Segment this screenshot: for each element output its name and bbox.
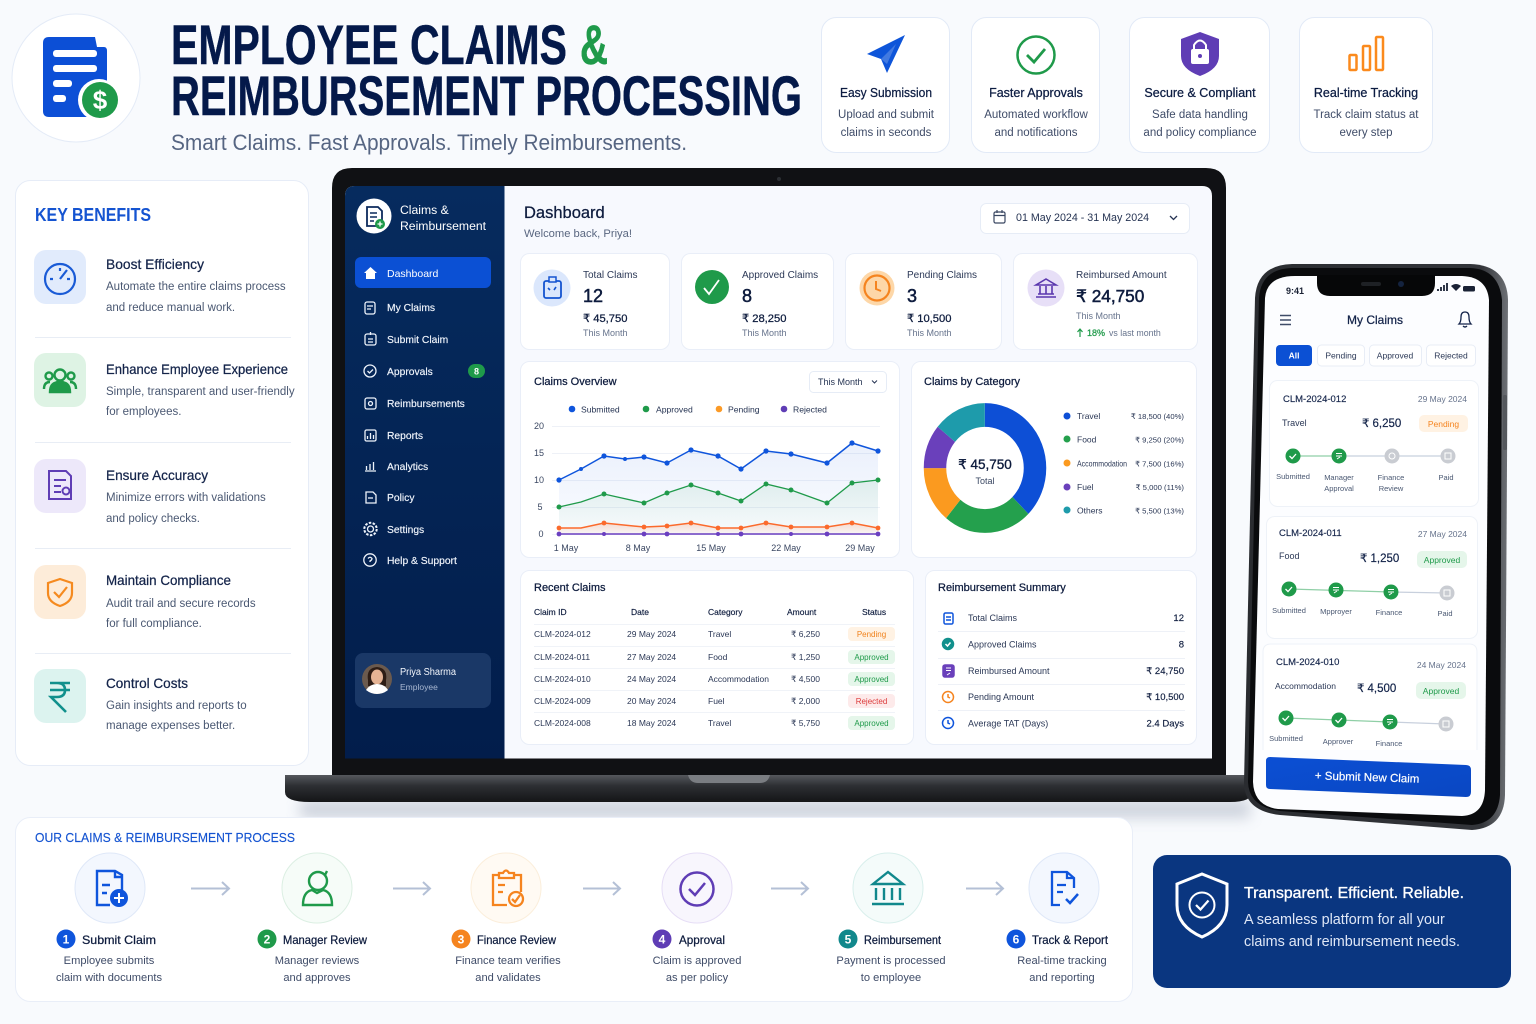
callout: transparent, efficient, reliable: claims and reimbursement needs. [1244,934,1460,950]
arrow 4 to 5 [771,882,808,895]
heading: process: OUR CLAIMS & REIMBURSEMENT PROCESS [35,830,295,845]
phone claim card 010: Submitted [1269,734,1303,743]
panel: recent claims table: Food [708,652,728,662]
sidebar navigation: Approvals [387,367,433,378]
panel: reimbursement summary: 12 [1173,613,1184,624]
phone notch [1317,275,1435,296]
phone claim card 010: Approved [1423,686,1459,696]
feature card: secure and compliant: Safe data handling [1152,109,1248,121]
step 3: finance review [452,853,561,984]
chart axes: 1 May [554,543,579,553]
category legend: ₹ 9,250 (20%) [1135,436,1184,444]
category legend: Food [1077,434,1097,444]
panel: recent claims table: ₹ 6,250 [791,629,820,639]
feature card: real-time tracking: Real-time Tracking [1314,86,1418,100]
step 1: submit claim: 1 [63,932,70,946]
phone claim card 010: Accommodation [1275,681,1336,691]
arrow 2 to 3 [393,882,430,895]
sidebar logo: Reimbursement [400,219,487,233]
phone claim card 012: Submitted [1276,472,1310,481]
chart axes: 8 May [626,543,651,553]
feature card: secure and compliant: Secure & Compliant [1144,86,1256,100]
step 6: track and report: 6 [1013,932,1020,946]
phone claim card 012: Approval [1324,484,1354,493]
approvals badge: 8 [474,366,479,376]
laptop lid [332,168,1226,778]
benefit: ensure accuracy [34,459,266,525]
category legend: ₹ 18,500 (40%) [1131,412,1184,421]
chart areas [559,443,878,534]
feature card: secure and compliant [1130,18,1270,152]
callout: transparent, efficient, reliable [1153,855,1511,988]
phone side button [1503,395,1507,450]
arrow 5 to 6 [966,882,1003,895]
phone header: My Claims [1347,313,1403,327]
panel: reimbursement summary: ₹ 24,750 [1146,666,1184,677]
step 6: track and report: and reporting [1029,972,1095,984]
step 2: manager review: and approves [283,972,351,984]
benefit: maintain compliance [34,565,256,630]
benefit: enhance employee experience [34,353,295,418]
benefit: enhance employee experience: Simple, transparent and user-friendly [106,386,295,398]
laptop shadow [300,800,1250,818]
callout: transparent, efficient, reliable: Transparent. Efficient. Reliable. [1244,885,1464,902]
panel: reimbursement summary [926,570,1196,744]
category legend: Fuel [1077,482,1094,492]
feature card: easy submission: Upload and submit [838,109,935,121]
phone [1244,264,1508,830]
benefit: ensure accuracy: Minimize errors with validations [106,492,266,504]
sidebar navigation: Submit Claim [387,335,448,346]
phone filter tabs: Pending [1325,350,1357,360]
KPI card: reimbursed amount: ₹ 24,750 [1076,286,1144,306]
feature card: easy submission [822,18,950,152]
panel: recent claims table: Travel [708,718,731,728]
panel: recent claims table: 29 May 2024 [627,629,676,639]
step 5: reimbursement: 5 [845,932,852,946]
panel: process flow [16,818,1132,1002]
user profile: Priya Sharma [400,667,456,678]
series: approved [556,478,880,510]
callout: transparent, efficient, reliable: A seamless platform for all your [1244,912,1445,928]
step 2: manager review [258,853,367,984]
phone claim card 011: Food [1279,551,1300,561]
phone claim card 011: ₹ 1,250 [1360,553,1399,565]
chart legend: Pending [728,404,760,414]
icon: shield with check [1177,874,1227,937]
sidebar logo: Claims & [400,203,449,217]
chart axes: 22 May [771,543,801,553]
benefit: control costs [34,669,247,732]
step 5: reimbursement [836,853,946,984]
laptop base [285,775,1252,802]
benefit: maintain compliance: for full compliance. [106,618,202,630]
panel: recent claims table: 27 May 2024 [627,652,676,662]
chart axes: 29 May [845,543,875,553]
status pills: Approved [854,675,889,684]
panel: recent claims table: CLM-2024-011 [534,652,590,662]
KPI card: total claims: 12 [583,286,603,306]
phone claim card 011 [1266,516,1478,638]
panel: recent claims table: CLM-2024-012 [534,629,591,639]
panel: recent claims table: CLM-2024-008 [534,718,591,728]
chart legend [569,404,827,414]
phone claim card 010: Approver [1323,737,1354,746]
panel: reimbursement summary: 8 [1179,640,1184,650]
chart axes: 5 [537,502,543,512]
phone status bar: 9:41 [1286,286,1304,296]
panel: recent claims table: 24 May 2024 [627,674,676,684]
phone filter tabs [1276,345,1476,366]
KPI card: approved claims: This Month [742,328,787,338]
KPI card: reimbursed amount [1014,254,1198,350]
panel: recent claims table: Amount [787,607,817,617]
feature card: real-time tracking [1300,18,1432,152]
benefit: boost efficiency: Boost Efficiency [106,256,204,272]
series: pending [557,521,880,530]
KPI card: total claims: This Month [583,328,628,338]
step 2: manager review: Manager reviews [275,955,360,967]
heading: key benefits: KEY BENEFITS [35,205,151,225]
feature card: real-time tracking: Track claim status at [1313,109,1419,121]
category legend: Others [1077,506,1103,516]
series: rejected [557,532,880,536]
KPI card: reimbursed amount: Reimbursed Amount [1076,270,1167,281]
chart legend: Approved [656,404,693,414]
title: & [580,13,608,76]
sidebar navigation: Reimbursements [387,399,465,410]
KPI card: reimbursed amount: vs last month [1109,328,1161,338]
category legend: Accommodation [1077,458,1127,468]
feature card: faster approvals: and notifications [994,127,1078,139]
phone claim card 010 [1263,644,1477,750]
category legend: ₹ 5,500 (13%) [1135,506,1184,516]
panel: recent claims table: Travel [708,629,731,639]
panel: reimbursement summary: 2.4 Days [1146,718,1184,730]
feature card: easy submission: Easy Submission [840,86,932,100]
user profile: Employee [400,682,438,692]
period dropdown [810,372,886,392]
logo: claims document with dollar coin: $ [93,85,108,115]
KPI card: reimbursed amount: This Month [1076,311,1121,321]
KPI card: approved claims: ₹ 28,250 [742,313,786,325]
phone claim card 012: Pending [1428,419,1459,429]
status pills: Rejected [856,697,887,706]
sidebar navigation: Reports [387,431,423,442]
status pills [848,627,895,730]
panel: reimbursement summary: Average TAT (Days) [968,718,1048,728]
KPI card: pending claims: Pending Claims [907,270,977,281]
step 4: approval: as per policy [666,972,729,984]
feature card: faster approvals: Automated workflow [984,109,1088,121]
panel: recent claims table: Category [708,607,743,617]
title [171,13,802,127]
category legend: Travel [1077,411,1100,421]
step 4: approval: 4 [659,932,666,946]
panel: reimbursement summary: Total Claims [968,613,1018,623]
phone claim card 011: 27 May 2024 [1418,529,1467,539]
step 3: finance review: and validates [475,972,541,984]
panel: reimbursement summary: ₹ 10,500 [1146,692,1184,703]
KPI card: total claims: Total Claims [583,270,637,281]
step 1: submit claim [56,853,162,984]
step 6: track and report [1006,853,1109,984]
phone claim card 011: Mpproyer [1320,607,1352,616]
panel: feature highlights [822,18,1432,152]
panel: reimbursement summary: Pending Amount [968,692,1035,702]
period dropdown: This Month [818,377,863,387]
feature card: faster approvals [972,18,1100,152]
phone claim card 012: 29 May 2024 [1418,394,1467,404]
phone claim card 012: CLM-2024-012 [1283,394,1346,405]
phone claim card 012: Manager [1324,473,1354,482]
chart axes: 0 [538,529,544,539]
panel: recent claims table: Status [862,607,886,617]
chart axes: 10 [534,475,544,485]
dashboard screen [345,186,1212,758]
panel: claims overview chart: Claims Overview [534,376,617,388]
phone claim card 010: Finance [1376,739,1402,748]
title: EMPLOYEE CLAIMS [171,13,567,76]
phone filter tabs: Rejected [1434,350,1468,360]
KPI card: approved claims [682,254,834,350]
laptop [285,168,1252,818]
series: submitted [556,440,881,483]
phone claim card 011: Approved [1424,555,1460,565]
panel: recent claims table: CLM-2024-009 [534,696,591,706]
panel: recent claims table: ₹ 5,750 [791,718,820,728]
phone submit button [1266,757,1471,797]
KPI card: total claims: ₹ 45,750 [583,313,627,325]
panel: claims overview chart [520,362,900,558]
chart axes [534,421,880,553]
phone screen [1253,276,1489,816]
KPI card: pending claims: ₹ 10,500 [907,313,951,325]
category legend: ₹ 5,000 (11%) [1136,483,1184,492]
step 3: finance review: Finance Review [477,933,556,947]
arrow 3 to 4 [583,882,620,895]
benefit: maintain compliance: Audit trail and secure records [106,598,256,610]
KPI card: approved claims: 8 [742,286,752,306]
phone claim card 010: CLM-2024-010 [1276,657,1339,668]
panel: recent claims table: Recent Claims [534,582,606,594]
donut chart [935,415,1035,521]
phone claim card 011: Submitted [1272,606,1306,615]
panel: recent claims table: Fuel [708,696,725,706]
KPI card: reimbursed amount: 18% [1087,328,1105,338]
phone status bar [1286,283,1475,296]
sidebar navigation: Help & Support [387,556,457,567]
panel: claims by category: Claims by Category [924,376,1020,388]
panel: reimbursement summary: Approved Claims [968,640,1037,650]
benefit: control costs: Control Costs [106,675,188,691]
step 2: manager review: 2 [264,932,271,946]
dashboard heading [524,204,632,240]
donut total [958,457,1012,486]
date range picker [980,204,1190,234]
dashboard heading: Dashboard [524,204,605,222]
KPI card: pending claims [846,254,1002,350]
feature card: faster approvals: Faster Approvals [989,86,1083,100]
donut total: Total [975,476,995,486]
date range picker: 01 May 2024 - 31 May 2024 [1016,212,1149,224]
step 6: track and report: Real-time tracking [1017,955,1107,967]
phone frame [1244,264,1508,830]
active nav item: dashboard [355,257,491,288]
panel: recent claims table: Claim ID [534,607,567,617]
sidebar logo [356,198,487,234]
panel: key benefits [16,180,308,766]
step 6: track and report: Track & Report [1032,933,1109,947]
user profile [355,653,491,708]
sidebar navigation: Policy [387,493,415,504]
panel: recent claims table: Date [631,607,649,617]
phone claim card 012: Finance [1378,473,1404,482]
phone claim card 011: Finance [1376,608,1402,617]
step 2: manager review: Manager Review [283,933,367,947]
step 1: submit claim: Submit Claim [82,933,156,947]
panel: reimbursement summary: Reimbursement Summary [938,582,1066,594]
phone claim card 012: Paid [1438,473,1454,482]
step 5: reimbursement: Payment is processed [836,955,946,967]
panel: recent claims table: 18 May 2024 [627,718,676,728]
benefit: enhance employee experience: for employees. [106,406,181,418]
sidebar navigation: Analytics [387,462,428,473]
chart legend: Rejected [793,404,827,414]
subtitle: Smart Claims. Fast Approvals. Timely Reimbursements. [171,130,687,155]
sidebar [345,186,504,758]
benefit: control costs: Gain insights and reports to [106,700,247,712]
benefit: maintain compliance: Maintain Compliance [106,572,231,588]
phone submit button: + Submit New Claim [1315,770,1420,786]
phone claim card 010: 24 May 2024 [1417,660,1466,670]
phone claim card 010: ₹ 4,500 [1357,683,1396,695]
step 4: approval [652,853,741,984]
logo: claims document with dollar coin [12,14,140,142]
phone claim card 012: ₹ 6,250 [1362,418,1401,430]
approvals badge [468,364,485,378]
panel: recent claims table: ₹ 1,250 [791,652,820,662]
feature card: secure and compliant: and policy compliance [1143,127,1257,139]
panel: recent claims table [520,570,914,744]
benefit: enhance employee experience: Enhance Employee Experience [106,361,288,377]
phone claim card 012 [1270,380,1478,506]
step 4: approval: Approval [679,933,725,947]
chart legend: Submitted [581,404,620,414]
step 3: finance review: Finance team verifies [455,955,561,967]
phone claim card 011: CLM-2024-011 [1279,528,1342,539]
KPI card: total claims [520,254,670,350]
sidebar navigation [364,302,465,567]
panel: recent claims table: CLM-2024-010 [534,674,591,684]
panel: recent claims table: ₹ 2,000 [791,696,820,706]
step 5: reimbursement: Reimbursement [864,933,942,947]
feature card: real-time tracking: every step [1339,127,1393,139]
sidebar navigation: My Claims [387,303,435,314]
arrow 1 to 2 [191,882,229,895]
panel: recent claims table: ₹ 4,500 [791,674,820,684]
KPI card: pending claims: This Month [907,328,952,338]
benefit: boost efficiency [34,250,286,314]
KPI card: pending claims: 3 [907,286,917,306]
chart axes: 20 [534,421,544,431]
status pills: Pending [857,630,886,639]
category legend [1064,411,1184,516]
benefit: ensure accuracy: Ensure Accuracy [106,467,208,483]
panel: claims by category [912,362,1196,558]
title: REIMBURSEMENT PROCESSING [171,64,802,127]
active nav item: dashboard: Dashboard [387,268,439,280]
phone claim card 012: Travel [1282,418,1307,428]
dashboard heading: Welcome back, Priya! [524,228,632,240]
benefit: control costs: manage expenses better. [106,720,235,732]
panel: recent claims table: Accommodation [708,674,769,684]
phone claim card 012: Review [1379,484,1404,493]
chart axes: 15 May [696,543,726,553]
donut total: ₹ 45,750 [958,457,1012,472]
step 1: submit claim: Employee submits [64,955,155,967]
feature card: easy submission: claims in seconds [841,127,932,139]
step 3: finance review: 3 [458,932,465,946]
status pills: Approved [854,653,889,662]
category legend: ₹ 7,500 (16%) [1135,460,1184,468]
chart axes: 15 [534,448,544,458]
phone header [1280,312,1471,327]
phone filter tabs: Approved [1377,350,1413,360]
panel: recent claims table: 20 May 2024 [627,696,676,706]
benefit: boost efficiency: and reduce manual work. [106,302,235,314]
step 5: reimbursement: to employee [861,972,921,984]
panel: reimbursement summary: Reimbursed Amount [968,666,1050,676]
benefit: ensure accuracy: and policy checks. [106,513,200,525]
status pills: Approved [854,719,889,728]
step 4: approval: Claim is approved [653,955,741,967]
phone filter tabs: All [1289,350,1299,360]
phone claim card 011: Paid [1437,609,1453,618]
sidebar navigation: Settings [387,525,424,536]
step 1: submit claim: claim with documents [56,972,162,984]
KPI card: approved claims: Approved Claims [742,270,818,281]
benefit: boost efficiency: Automate the entire claims process [106,281,286,293]
